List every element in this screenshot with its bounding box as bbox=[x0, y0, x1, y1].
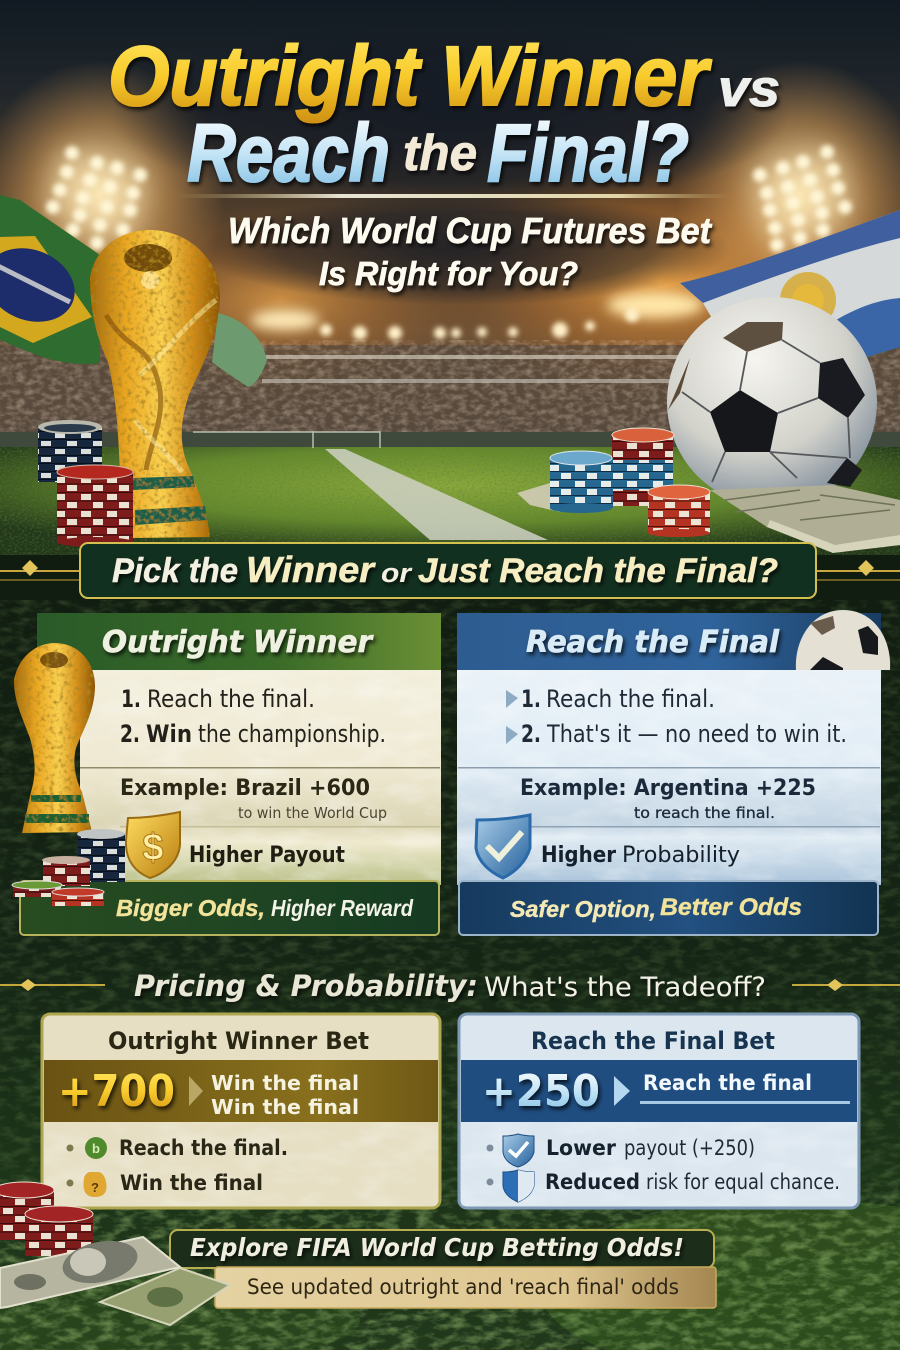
card: outright winner bet bbox=[42, 1014, 440, 1208]
subtitle: Which World Cup Futures Bet bbox=[228, 210, 713, 251]
icon: gold dollar shield: $ bbox=[142, 827, 164, 869]
flag: Argentina bbox=[680, 210, 900, 360]
title divider bbox=[175, 194, 730, 198]
icon: gold dollar shield bbox=[126, 812, 180, 878]
steps: reach the final: That's it — no need to win it. bbox=[546, 720, 847, 748]
steps: outright winner: Win bbox=[146, 720, 192, 748]
section heading: pricing and probability bbox=[0, 969, 900, 1003]
label: higher payout: Higher Payout bbox=[189, 843, 345, 868]
soccer ball bbox=[667, 297, 877, 507]
subtitle: Is Right for You? bbox=[319, 255, 578, 292]
title: vs bbox=[718, 60, 780, 118]
icon: soccer ball bbox=[796, 610, 890, 670]
footer strip: bigger odds: Bigger Odds, bbox=[116, 895, 265, 921]
panel: reach the final bbox=[457, 610, 890, 935]
steps: outright winner: Reach the final. bbox=[147, 685, 315, 713]
card heading: outright winner bet: Outright Winner Bet bbox=[108, 1027, 369, 1055]
panel heading: reach the final: Reach the Final bbox=[526, 625, 780, 660]
floodlights bbox=[46, 145, 852, 252]
card: reach the final bet bbox=[459, 1014, 859, 1208]
bullet: reach the final: Reach the final. bbox=[119, 1136, 288, 1160]
panel heading: outright winner: Outright Winner bbox=[102, 625, 374, 660]
example: brazil odds: Example: Brazil +600 bbox=[120, 776, 370, 801]
bullet: reduced risk: Reduced bbox=[545, 1170, 640, 1194]
bullet: reach the final: b bbox=[92, 1141, 100, 1156]
odds band: +700: Win the final bbox=[211, 1071, 359, 1095]
trophy: small bbox=[14, 643, 95, 833]
bullet: lower payout bbox=[486, 1134, 755, 1167]
example: brazil odds bbox=[120, 776, 387, 822]
bullet: win the final: Win the final bbox=[120, 1171, 263, 1195]
example: argentina odds bbox=[520, 776, 816, 822]
odds band: +250: Reach the final bbox=[643, 1071, 812, 1095]
flag: Brazil bbox=[0, 195, 267, 387]
label: higher probability bbox=[541, 843, 740, 868]
bullet: win the final: ? bbox=[91, 1180, 99, 1195]
steps: outright winner bbox=[120, 685, 386, 748]
steps: reach the final: 2. bbox=[521, 720, 541, 748]
steps: reach the final bbox=[506, 685, 847, 748]
poker chips: bottom left bbox=[0, 1182, 93, 1256]
title: Outright Winner bbox=[108, 29, 712, 123]
footer strip: safer option: Safer Option, bbox=[510, 896, 656, 922]
steps: reach the final: 1. bbox=[521, 685, 541, 713]
banner: question: Pick the bbox=[112, 552, 238, 590]
poker chips: panel bbox=[12, 829, 125, 906]
banner: question: Just Reach the Final? bbox=[418, 552, 778, 590]
icon: blue check shield bbox=[476, 815, 530, 878]
label: higher probability: Probability bbox=[622, 843, 740, 868]
cash pile: right bbox=[517, 483, 900, 553]
odds band: +700: Win the final bbox=[211, 1095, 359, 1119]
example: argentina odds: Example: Argentina +225 bbox=[520, 776, 816, 801]
call to action bbox=[170, 1230, 716, 1308]
steps: outright winner: 2. bbox=[120, 720, 140, 748]
label: higher probability: Higher bbox=[541, 843, 616, 868]
odds band: +700: +700 bbox=[58, 1066, 175, 1117]
poker chips: left stacks bbox=[38, 420, 133, 547]
bullet: reduced risk: risk for equal chance. bbox=[646, 1170, 840, 1194]
bullet: reduced risk bbox=[486, 1170, 840, 1202]
poker chips: right stacks bbox=[550, 428, 710, 537]
title: Reach bbox=[187, 108, 390, 199]
steps: outright winner: 1. bbox=[121, 685, 141, 713]
trophy: large bbox=[90, 230, 220, 538]
banner: question: Winner bbox=[246, 549, 376, 590]
card heading: reach the final bet: Reach the Final Bet bbox=[531, 1027, 775, 1055]
banner: question bbox=[0, 543, 900, 598]
panel: outright winner bbox=[12, 613, 441, 935]
title bbox=[108, 29, 780, 199]
odds band: +250 bbox=[461, 1060, 857, 1122]
footer strip: bigger odds bbox=[20, 881, 439, 935]
odds band: +250: +250 bbox=[482, 1066, 600, 1117]
example: brazil odds: to win the World Cup bbox=[238, 804, 387, 822]
bullet: win the final bbox=[66, 1171, 263, 1197]
steps: outright winner: the championship. bbox=[198, 720, 386, 748]
banner: question: or bbox=[381, 558, 413, 588]
odds band: +700 bbox=[44, 1060, 438, 1122]
title: Final? bbox=[487, 108, 689, 199]
footer strip: safer option bbox=[459, 881, 878, 935]
cta subtext: See updated outright and 'reach final' odds bbox=[247, 1275, 679, 1299]
cta headline: Explore FIFA World Cup Betting Odds! bbox=[190, 1233, 684, 1262]
subtitle bbox=[228, 210, 713, 292]
section heading: pricing and probability: Pricing & Probability: bbox=[134, 969, 478, 1003]
section heading: pricing and probability: What's the Tradeoff? bbox=[484, 972, 766, 1003]
footer strip: safer option: Better Odds bbox=[660, 894, 802, 921]
footer strip: bigger odds: Higher Reward bbox=[271, 895, 414, 921]
bullet: lower payout: Lower bbox=[546, 1136, 617, 1160]
example: argentina odds: to reach the final. bbox=[634, 804, 775, 822]
bullet: lower payout: payout (+250) bbox=[624, 1136, 755, 1160]
steps: reach the final: Reach the final. bbox=[546, 685, 715, 713]
cash pile: bottom left bbox=[0, 1235, 230, 1325]
title: the bbox=[403, 125, 477, 181]
